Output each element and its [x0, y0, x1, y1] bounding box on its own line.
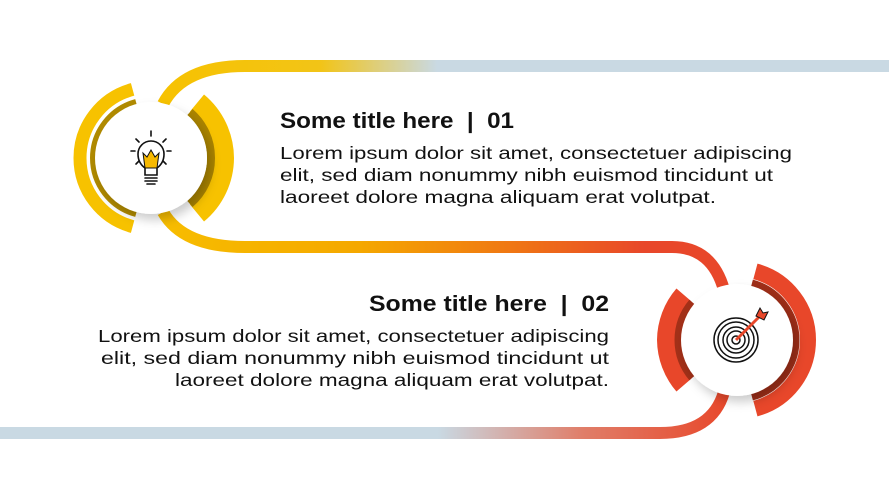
text block 2 — [98, 291, 609, 390]
track: top line — [163, 66, 889, 104]
text block 2: Some title here | 02 — [369, 291, 609, 316]
text block 1: elit, sed diam nonummy nibh euismod tincidunt ut — [280, 165, 773, 185]
text block 2: Lorem ipsum dolor sit amet, consectetuer adipiscing — [98, 326, 609, 346]
text block 1: Some title here | 01 — [280, 108, 514, 133]
track: bottom line — [0, 392, 724, 433]
text block 2: elit, sed diam nonummy nibh euismod tincidunt ut — [101, 348, 609, 368]
text block 2: laoreet dolore magna aliquam erat volutpat. — [175, 370, 609, 390]
icon: target — [714, 308, 768, 362]
text block 1: Lorem ipsum dolor sit amet, consectetuer adipiscing — [280, 143, 792, 163]
text block 1 — [280, 108, 792, 207]
track: middle connector — [163, 212, 724, 290]
text block 1: laoreet dolore magna aliquam erat volutpat. — [280, 187, 716, 207]
icon: lightbulb — [131, 131, 171, 184]
node 1: lightbulb — [80, 89, 223, 227]
node 2: target — [667, 271, 808, 409]
